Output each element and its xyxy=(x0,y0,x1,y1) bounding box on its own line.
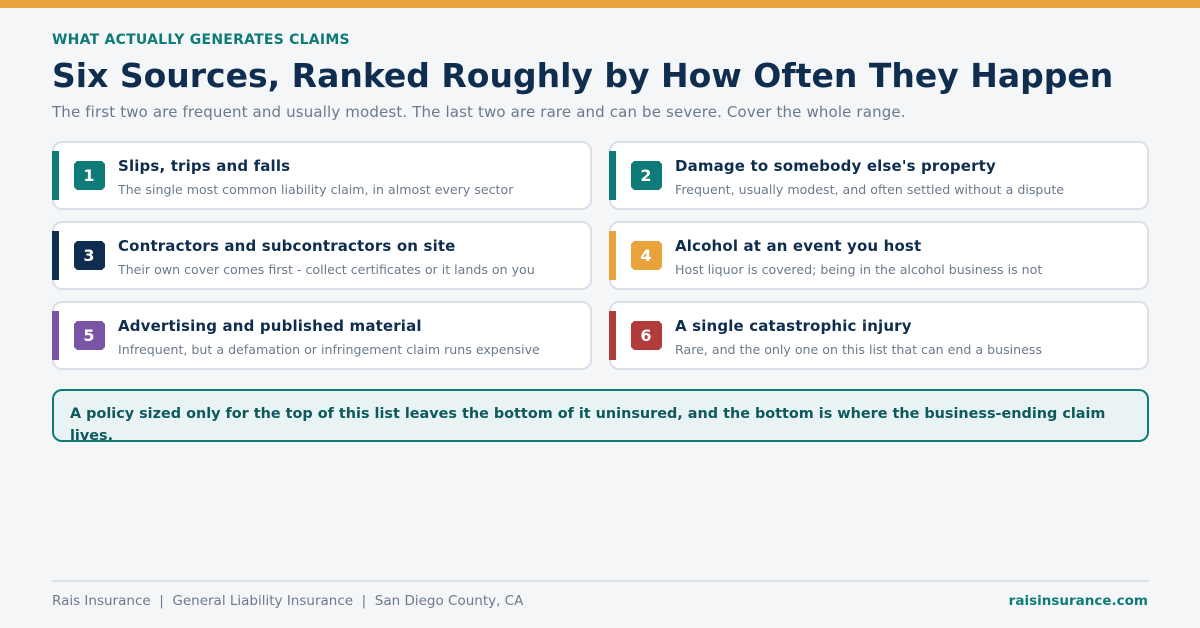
title: Six Sources, Ranked Roughly by How Often They Happen xyxy=(52,56,1113,95)
badge 1: 1 xyxy=(83,166,95,185)
badge 2 xyxy=(631,161,662,190)
description 5: Infrequent, but a defamation or infringement claim runs expensive xyxy=(118,342,540,357)
panel: source 4 xyxy=(609,221,1149,290)
heading 3: Contractors and subcontractors on site xyxy=(118,237,456,255)
badge 4: 4 xyxy=(640,246,652,265)
badge 6 xyxy=(631,321,662,350)
top accent bar xyxy=(0,0,1200,8)
heading 6: A single catastrophic injury xyxy=(675,317,912,335)
description 4: Host liquor is covered; being in the alcohol business is not xyxy=(675,262,1042,277)
badge 2: 2 xyxy=(640,166,652,185)
panel: source 2 xyxy=(609,141,1149,210)
description 2: Frequent, usually modest, and often settled without a dispute xyxy=(675,182,1064,197)
heading 2: Damage to somebody else's property xyxy=(675,157,996,175)
eyebrow heading: WHAT ACTUALLY GENERATES CLAIMS xyxy=(52,32,350,48)
badge 3: 3 xyxy=(83,246,95,265)
panel: source 6 xyxy=(609,301,1149,370)
badge 1 xyxy=(74,161,105,190)
badge 4 xyxy=(631,241,662,270)
subtitle: The first two are frequent and usually modest. The last two are rare and can be severe. Cover the whole range. xyxy=(52,103,906,121)
heading 1: Slips, trips and falls xyxy=(118,157,290,175)
badge 6: 6 xyxy=(640,326,652,345)
description 6: Rare, and the only one on this list that can end a business xyxy=(675,342,1042,357)
badge 3 xyxy=(74,241,105,270)
description 1: The single most common liability claim, in almost every sector xyxy=(118,182,513,197)
description 3: Their own cover comes first - collect certificates or it lands on you xyxy=(118,262,535,277)
heading 5: Advertising and published material xyxy=(118,317,422,335)
panel: source 1 xyxy=(52,141,592,210)
panel: source 3 xyxy=(52,221,592,290)
heading 4: Alcohol at an event you host xyxy=(675,237,921,255)
footer divider xyxy=(52,580,1149,582)
callout xyxy=(52,389,1149,442)
badge 5 xyxy=(74,321,105,350)
badge 5: 5 xyxy=(83,326,95,345)
panel: source 5 xyxy=(52,301,592,370)
footer website: raisinsurance.com xyxy=(1009,593,1148,609)
footer source line: Rais Insurance | General Liability Insurance | San Diego County, CA xyxy=(52,593,523,609)
